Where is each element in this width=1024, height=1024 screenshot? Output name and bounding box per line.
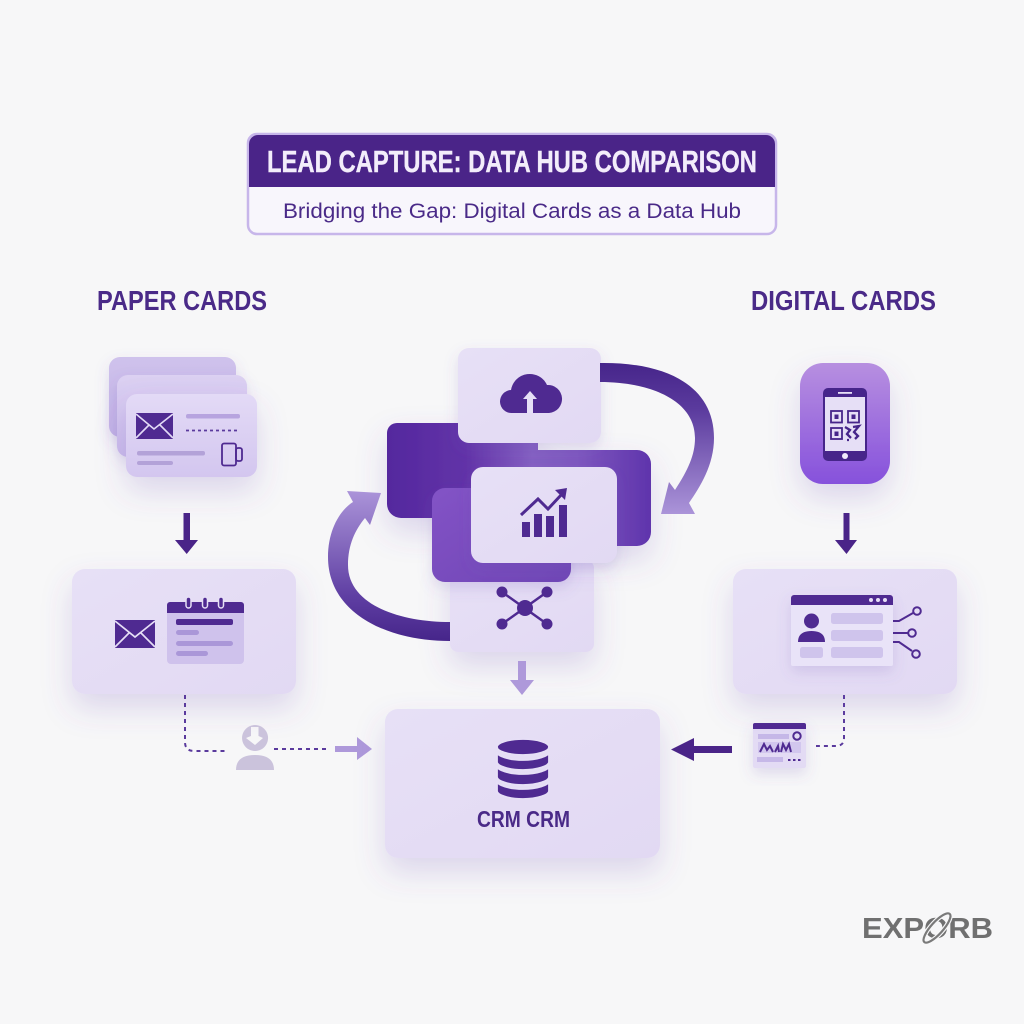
heading: digital cards: DIGITAL CARDS (751, 285, 936, 316)
panel: chart card (471, 467, 617, 563)
title text: LEAD CAPTURE: DATA HUB COMPARISON (267, 144, 757, 179)
dashed connector: digital to dashboard (816, 695, 844, 746)
icon: network nodes (496, 586, 552, 630)
arrow: paper cards down (175, 513, 198, 554)
icon: database (497, 739, 549, 799)
arrow: light to CRM (335, 737, 372, 760)
arrow: curved top-right (600, 363, 714, 514)
title block (248, 134, 776, 234)
panel: mid purple card (432, 488, 571, 582)
paper card stack (109, 357, 257, 477)
logo: EXPORB: EXPORB (862, 913, 993, 945)
arrow: dark to CRM (671, 738, 732, 761)
arrow: hub to CRM (510, 661, 534, 695)
dashed connector: paper to person (185, 695, 226, 751)
icon: phone (823, 388, 867, 461)
icon: faded person (236, 725, 274, 770)
heading: paper cards: PAPER CARDS (97, 285, 267, 316)
panel: top cloud card (458, 348, 601, 443)
panel: CRM (385, 709, 660, 858)
icon: user (798, 614, 825, 642)
icon: connector nodes (893, 607, 921, 658)
panel: paper capture (72, 569, 296, 694)
central hub cluster (387, 348, 651, 652)
panel: merged dark cards (387, 423, 651, 546)
icon: growth chart (521, 488, 567, 537)
profile window (791, 595, 893, 666)
icon: cloud upload (500, 374, 562, 413)
icon: mug (222, 444, 242, 466)
icon: envelope on card (136, 413, 173, 439)
QR code (831, 411, 859, 440)
CRM label: CRM CRM (477, 806, 570, 832)
subtitle: Bridging the Gap: Digital Cards as a Data Hub (283, 200, 741, 223)
arrow: curved bottom-left (328, 491, 450, 641)
arrow: digital cards down (835, 513, 857, 554)
icon: mini dashboard (753, 723, 806, 768)
dashed connector: person to CRM (274, 748, 328, 750)
panel: bottom network card (450, 560, 594, 652)
digital tile with phone (800, 363, 890, 484)
icon: calendar form (167, 597, 244, 664)
panel: digital profile (733, 569, 957, 694)
icon: envelope (115, 620, 155, 648)
